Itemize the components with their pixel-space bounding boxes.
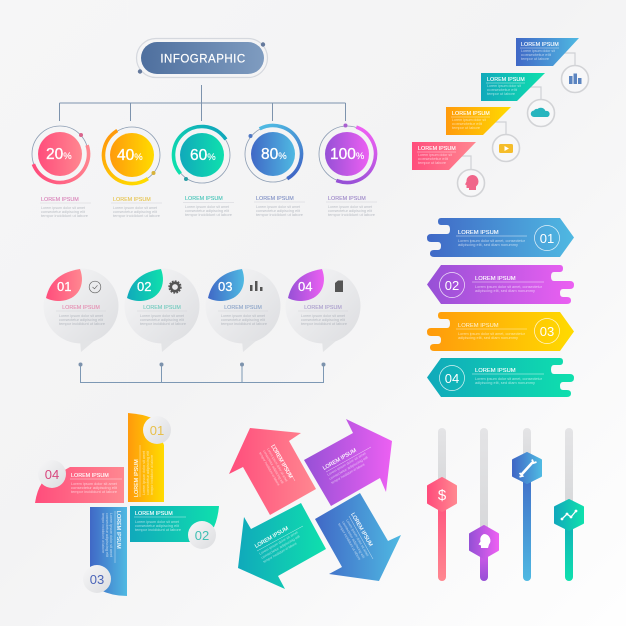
stair step: teal cloud: LOREM IPSUM (487, 77, 525, 83)
stair step: blue chart: tempor ut labore (521, 57, 549, 61)
stair step: teal cloud: tempor ut labore (487, 92, 515, 96)
circle: 20% (24, 118, 96, 190)
cross panel 01 orange: Lorem ipsum dolor sit amet (142, 451, 146, 495)
speech bubble 01: 01 (57, 279, 71, 294)
speech bubble 04: tempor incididunt ut labore (301, 322, 347, 326)
cross panel 03 blue: 03 (90, 572, 104, 587)
stair step: orange video: LOREM IPSUM (452, 111, 490, 117)
ribbon 03 (427, 312, 574, 351)
circle: 60%: 60% (190, 147, 216, 164)
arrow: purple up-right: tempor incididunt ut labore (330, 462, 365, 485)
slider: dollar: $ (438, 487, 447, 504)
caption: 100%: LOREM IPSUM (328, 196, 366, 202)
caption: 80%: tempor incididunt ut labore (256, 213, 303, 217)
ribbon 01: LOREM IPSUM (458, 230, 499, 236)
ribbon 04: LOREM IPSUM (475, 368, 516, 374)
circle: 100%: 100% (330, 146, 365, 163)
arrow: blue down-right: LOREM IPSUM (349, 512, 374, 548)
cross panel 02 teal: consectetur adipiscing elit (135, 524, 179, 528)
cross panel 03 blue: tempor incididunt ut labore (101, 513, 105, 553)
speech bubble 03: LOREM IPSUM (224, 305, 262, 311)
circle: 100% (311, 118, 383, 190)
circle: 80% (234, 115, 312, 193)
stair step: orange video: consectetur elit (452, 122, 482, 126)
arrow: blue down-right: consectetur adipiscing elit (341, 520, 366, 559)
ribbon 01: 01 (540, 231, 554, 246)
stair step: orange video (446, 107, 520, 162)
slider: head (470, 428, 498, 581)
ribbon 02: LOREM IPSUM (475, 276, 516, 282)
stair step: pink head: tempor ut labore (418, 161, 446, 165)
caption: 80%: Lorem ipsum dolor sit amet (256, 205, 300, 209)
ribbon 04: adipiscing elit, sed diam nonummy (475, 381, 535, 385)
arrow: teal down-left: consectetur adipiscing elit (260, 534, 301, 560)
arrow: pink up-left: Lorem ipsum dolor sit amet (266, 448, 289, 482)
arrow: purple up-right: Lorem ipsum dolor sit amet (326, 451, 367, 477)
speech bubble 04: consectetur adipiscing elit (301, 318, 345, 322)
speech bubble 01: Lorem ipsum dolor sit amet (59, 314, 103, 318)
cross panel 01 orange: LOREM IPSUM (134, 459, 140, 497)
cross panel 02 teal: LOREM IPSUM (135, 511, 173, 517)
stair step: teal cloud: Lorem ipsum dolor sit (487, 84, 521, 88)
arrow: teal down-left (238, 503, 326, 589)
ribbon 01 (427, 218, 574, 257)
slider: wrench (513, 428, 541, 581)
stair step: pink head: Lorem ipsum dolor sit (418, 153, 452, 157)
cross panel 01 orange (128, 413, 171, 502)
ribbon 03: LOREM IPSUM (458, 323, 499, 329)
arrow: purple up-right: LOREM IPSUM (322, 447, 358, 472)
ribbon 03: 03 (540, 324, 554, 339)
cross panel 04 pink: LOREM IPSUM (71, 473, 109, 479)
caption: 80%: consectetur adipiscing elit (256, 209, 300, 213)
cross panel 01 orange: tempor incididunt ut labore (150, 455, 154, 495)
cross panel 03 blue (83, 507, 127, 596)
cross panel 02 teal (130, 506, 219, 549)
caption: 100%: tempor incididunt ut labore (328, 213, 375, 217)
speech bubble 03: tempor incididunt ut labore (221, 322, 267, 326)
speech bubble 01: consectetur adipiscing elit (59, 318, 103, 322)
caption: 40% (111, 197, 162, 218)
arrow: pink up-left: tempor incididunt ut labore (258, 452, 281, 486)
ribbon 01: adipiscing elit, sed diam nonummy (458, 243, 518, 247)
arrow: teal down-left: LOREM IPSUM (254, 525, 290, 550)
speech bubble 02: tempor incididunt ut labore (140, 322, 186, 326)
ribbon 02: 02 (445, 278, 459, 293)
stair step: blue chart: LOREM IPSUM (521, 42, 559, 48)
caption: 20%: tempor incididunt ut labore (41, 214, 88, 218)
speech bubble 01 (44, 268, 118, 352)
arrow: blue down-right: tempor incididunt ut labore (337, 522, 362, 561)
caption: 60% (183, 196, 234, 217)
circle: 40%: 40% (117, 147, 143, 164)
caption: 60%: LOREM IPSUM (185, 196, 223, 202)
speech bubble 04: LOREM IPSUM (304, 305, 342, 311)
caption: 80% (254, 196, 305, 217)
arrow: teal down-left: tempor incididunt ut labore (262, 541, 297, 564)
caption: 60%: Lorem ipsum dolor sit amet (185, 205, 229, 209)
cross panel 04 pink: Lorem ipsum dolor sit amet (71, 482, 117, 486)
speech bubble 04 (286, 268, 360, 352)
speech bubble 01: LOREM IPSUM (62, 305, 100, 311)
speech bubble 02: LOREM IPSUM (143, 305, 181, 311)
timeline connector (78, 362, 326, 382)
arrow: pink up-left: LOREM IPSUM (269, 444, 294, 480)
slider: dollar (428, 428, 456, 581)
stair step: blue chart: Lorem ipsum dolor sit (521, 49, 555, 53)
caption: 100%: Lorem ipsum dolor sit amet (328, 205, 372, 209)
cross panel 04 pink: 04 (45, 467, 59, 482)
caption: 60%: consectetur adipiscing elit (185, 209, 229, 213)
caption: 40%: consectetur adipiscing elit (113, 210, 157, 214)
circle: 20%: 20% (46, 146, 72, 163)
ribbon 02: adipiscing elit, sed diam nonummy (475, 289, 535, 293)
arrow: blue down-right (315, 493, 401, 581)
stair step: pink head (412, 142, 484, 196)
caption: 20%: Lorem ipsum dolor sit amet (41, 206, 85, 210)
ribbon 04: Lorem ipsum dolor sit amet, consectetur (475, 377, 543, 381)
circle: 80%: 80% (261, 146, 287, 163)
cross panel 04 pink: tempor incididunt ut labore (71, 490, 117, 494)
caption: 100% (326, 196, 377, 217)
arrow: pink up-left (229, 428, 316, 515)
caption: 40%: tempor incididunt ut labore (113, 214, 160, 218)
speech bubble 01: tempor incididunt ut labore (59, 322, 105, 326)
cross panel 03 blue: consectetur adipiscing elit (105, 513, 109, 557)
arrow: teal down-left: Lorem ipsum dolor sit amet (258, 530, 299, 556)
ribbon 01: Lorem ipsum dolor sit amet, consectetur (458, 239, 526, 243)
caption: 40%: Lorem ipsum dolor sit amet (113, 206, 157, 210)
ribbon 03: Lorem ipsum dolor sit amet, consectetur (458, 332, 526, 336)
speech bubble 04: Lorem ipsum dolor sit amet (301, 314, 345, 318)
speech bubble 02 (124, 268, 200, 352)
ribbon 03: adipiscing elit, sed diam nonummy (458, 336, 518, 340)
circle: 60% (162, 115, 242, 195)
stair step: blue chart: consectetur elit (521, 53, 551, 57)
caption: 40%: LOREM IPSUM (113, 197, 151, 203)
caption: 20%: LOREM IPSUM (41, 197, 79, 203)
cross panel 04 pink (35, 460, 124, 503)
speech bubble 02: Lorem ipsum dolor sit amet (140, 314, 184, 318)
speech bubble 03: consectetur adipiscing elit (221, 318, 265, 322)
stair step: blue chart (516, 38, 588, 92)
stair step: teal cloud (481, 73, 554, 126)
arrow: pink up-left: consectetur adipiscing elit (262, 450, 285, 484)
arrow: blue down-right: Lorem ipsum dolor sit amet (345, 518, 370, 557)
cross panel 03 blue: LOREM IPSUM (115, 511, 121, 549)
cross panel 02 teal: tempor incididunt ut labore (135, 528, 181, 532)
ribbon 02 (427, 265, 574, 304)
cross panel 02 teal: Lorem ipsum dolor sit amet (135, 520, 179, 524)
stair step: pink head: consectetur elit (418, 157, 448, 161)
caption: 20% (40, 197, 91, 218)
cross panel 01 orange: 01 (150, 423, 164, 438)
slider: trend (555, 428, 583, 581)
stair step: orange video: tempor ut labore (452, 126, 480, 130)
cross panel 01 orange: consectetur adipiscing elit (146, 451, 150, 495)
ribbon 04 (427, 358, 574, 397)
circle: 40% (92, 115, 172, 195)
cross panel 02 teal: 02 (195, 528, 209, 543)
stair step: teal cloud: consectetur elit (487, 88, 517, 92)
ribbon 04: 04 (445, 371, 459, 386)
arrow: purple up-right (304, 419, 392, 506)
stair step: orange video: Lorem ipsum dolor sit (452, 118, 486, 122)
speech bubble 03 (206, 268, 280, 352)
connector tree (60, 85, 346, 121)
stair step: pink head: LOREM IPSUM (418, 146, 456, 152)
speech bubble 04: 04 (298, 279, 312, 294)
ribbon 02: Lorem ipsum dolor sit amet, consectetur (475, 285, 543, 289)
caption: 60%: tempor incididunt ut labore (185, 213, 232, 217)
arrow: purple up-right: consectetur adipiscing elit (328, 455, 369, 481)
speech bubble 03: Lorem ipsum dolor sit amet (221, 314, 265, 318)
caption: 20%: consectetur adipiscing elit (41, 210, 85, 214)
caption: 80%: LOREM IPSUM (256, 196, 294, 202)
cross panel 03 blue: Lorem ipsum dolor sit amet (109, 513, 113, 557)
speech bubble 02: 02 (137, 279, 151, 294)
speech bubble 03: 03 (218, 279, 232, 294)
title pill (136, 38, 268, 78)
caption: 100%: consectetur adipiscing elit (328, 209, 372, 213)
speech bubble 02: consectetur adipiscing elit (140, 318, 184, 322)
cross panel 04 pink: consectetur adipiscing elit (71, 486, 117, 490)
title pill: INFOGRAPHIC (160, 54, 246, 66)
